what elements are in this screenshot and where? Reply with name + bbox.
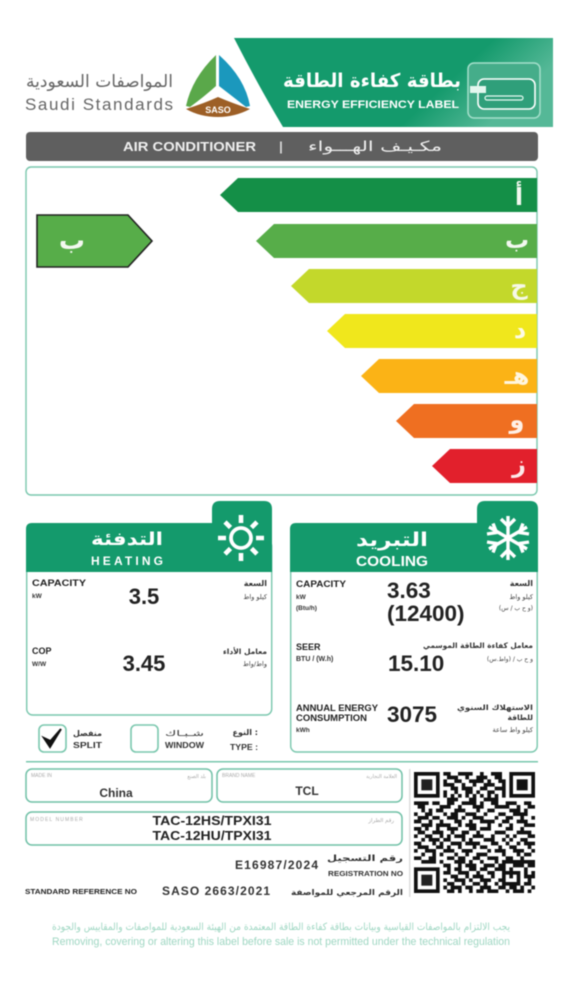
cooling Arabic title: التبريد [356,529,428,551]
split label: SPLIT [73,741,102,750]
cooling annual energy row [296,702,534,734]
banner Arabic title: بطاقة كفاءة الطاقة [283,70,461,92]
cooling English title: COOLING [356,553,428,570]
cooling SEER row: معامل كفاءة الطاقة الموسمي [423,641,533,650]
heating capacity row [32,578,268,609]
panel: cooling [290,501,538,752]
cooling capacity row: (و ح ب / س) [499,605,533,612]
heating capacity row: كيلو واط [243,593,268,601]
faded footer note: Removing, covering or altering this label before sale is not permitted under the technical regulation [52,936,510,948]
rating arrow F [396,404,537,438]
logo: SASO emblem: SASO [205,105,231,115]
field: model number: TAC-12HU/TPXI31 [152,828,272,843]
standard reference: الرقم المرجعي للمواصفة [291,888,403,897]
heating COP row: W/W [32,661,47,668]
type label [230,728,258,752]
panel: heating [26,501,272,715]
current rating indicator [37,215,152,267]
heating capacity row: CAPACITY [32,578,86,588]
split checkbox ticked [39,725,66,752]
window label: WINDOW [165,741,204,750]
cooling annual energy row: 3075 [387,702,437,727]
rating arrow F: و [509,406,524,434]
field: model number: TAC-12HS/TPXI31 [152,813,272,828]
standard reference: STANDARD REFERENCE NO [25,887,137,896]
QR code [414,774,535,891]
standard reference: SASO 2663/2021 [162,884,270,898]
registration number [235,854,403,878]
title bar: air conditioner [26,132,538,161]
rating arrow G [432,449,537,483]
logo: SASO emblem [186,55,250,117]
cooling annual energy row: الاستهلاك السنوي [457,703,533,712]
heating capacity row: kW [32,593,43,600]
icon: sun [218,515,264,561]
cooling capacity row: CAPACITY [296,579,346,589]
field: brand name: BRAND NAME [222,773,256,779]
registration number: رقم التسجيل [327,854,403,864]
cooling capacity row: (Btu/h) [296,605,317,612]
panel: unit type [39,725,258,752]
icon: snowflake [487,516,529,560]
title bar: air conditioner: AIR CONDITIONER [123,139,257,154]
heating capacity row: السعة [244,579,267,588]
cooling SEER row [296,641,533,676]
title bar: air conditioner: مكـيـف الهـــواء [308,139,442,155]
cooling capacity row: 3.63 [387,578,431,603]
cooling capacity row: kW [296,594,307,601]
cooling SEER row: 15.10 [388,651,444,676]
rating arrow C: ج [510,272,528,300]
heating COP row: واط/واط [243,660,267,668]
rating arrow E [361,359,537,393]
field: brand name [217,769,402,802]
type label: TYPE : [230,743,258,752]
heating COP row: COP [32,646,52,656]
field: brand name: العلامة التجارية [366,774,397,780]
faded footer note [52,922,510,948]
field: made in: MADE IN [31,773,52,779]
cooling annual energy row: kWh [296,727,310,734]
rating arrow A: أ [515,181,523,211]
current rating indicator: ب [59,226,85,256]
panel: energy rating scale [26,167,537,495]
field: made in: بلد الصنع [187,774,206,780]
field: made in [26,769,212,802]
field: model number [26,812,402,845]
field: model number: MODEL NUMBER [30,817,84,823]
cooling annual energy row: CONSUMPTION [296,713,367,723]
title bar: air conditioner: | [279,139,283,154]
cooling SEER row: و ح ب / (واط.س) [487,656,533,663]
banner English title: ENERGY EFFICIENCY LABEL [287,99,459,111]
split label [73,729,102,750]
heating COP row: معامل الأداء [223,647,267,656]
type label: النوع : [233,728,258,737]
field: made in: China [99,786,133,800]
registration number: E16987/2024 [235,858,318,872]
window label [165,729,204,750]
split label: منفصل [73,729,102,738]
cooling capacity row: (12400) [387,601,465,626]
window label: شـبـاك [165,729,204,738]
cooling annual energy row: كيلو واط ساعة [493,726,534,734]
heating COP row: 3.45 [123,651,165,676]
heating COP row [32,646,267,676]
icon: air conditioner [468,63,540,118]
logo: Saudi Standards wordmark: Saudi Standards [25,95,173,114]
rating arrow B: ب [505,226,529,254]
rating arrow E: هـ [504,362,529,390]
rating arrow B [256,224,537,258]
faded footer note: يجب الالتزام بالمواصفات القياسية وبيانات بطاقة كفاءة الطاقة المعتمدة من الهيئة السعودية للمواصفات والمقاييس والجودة [52,922,510,933]
cooling capacity row: السعة [510,579,533,588]
registration number: REGISTRATION NO [328,869,403,878]
logo: Saudi Standards wordmark [25,72,173,114]
rating arrow C [291,269,537,303]
rating arrow D: د [514,316,526,344]
cooling annual energy row: ANNUAL ENERGY [296,703,378,713]
standard reference [25,884,403,898]
rating arrow D [327,314,537,348]
cooling SEER row: SEER [296,642,321,652]
field: brand name: TCL [295,784,319,798]
rating arrow A [220,178,537,212]
window checkbox empty [131,725,158,752]
field: model number: رقم الطراز [367,818,394,824]
logo: Saudi Standards wordmark: المواصفات السعودية [26,72,173,92]
rating arrow G: ز [511,450,526,478]
cooling annual energy row: للطاقة [508,713,533,722]
header banner [234,38,553,127]
cooling capacity row [296,578,534,626]
heating capacity row: 3.5 [129,584,159,609]
heating Arabic title: التدفئة [91,529,163,550]
cooling capacity row: كيلو واط [509,593,534,601]
cooling SEER row: BTU / (W.h) [296,656,333,663]
heating English title: HEATING [91,554,163,568]
